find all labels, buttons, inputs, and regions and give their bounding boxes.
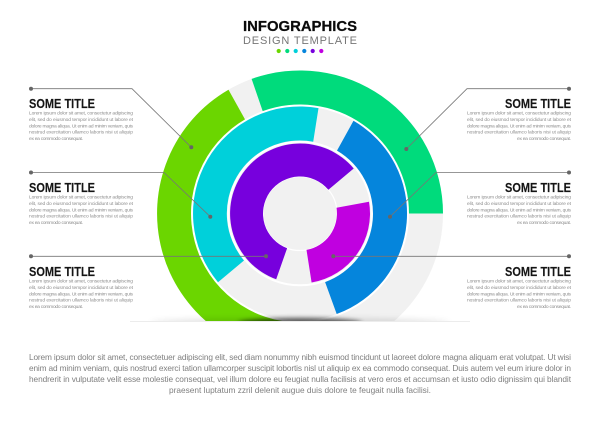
callout text: nostrud exercitation ullamco laboris nisi ut aliquip bbox=[467, 130, 571, 136]
segment: cyan middle ring bbox=[193, 106, 318, 282]
callout text bbox=[29, 279, 134, 310]
footer paragraph: hendrerit in vulputate velit esse molestie consequat, vel illum dolore eu feugiat nulla facilisis at vero eros et accumsan et iusto odio dignissim qui blandit bbox=[29, 374, 572, 384]
callout title: SOME TITLE bbox=[29, 265, 95, 279]
leader line bbox=[388, 170, 571, 219]
subheading: design template: DESIGN TEMPLATE bbox=[243, 35, 357, 47]
callout text: Lorem ipsum dolor sit amet, consectetur adipiscing bbox=[29, 111, 133, 117]
callout: middle left bbox=[29, 170, 212, 226]
heading: infographics: INFOGRAPHICS bbox=[243, 19, 357, 35]
colour dots bbox=[277, 49, 323, 53]
callout text bbox=[467, 279, 572, 310]
leader line bbox=[29, 87, 193, 149]
chart background rings bbox=[218, 79, 443, 321]
callout: bottom left bbox=[29, 254, 268, 310]
footer paragraph bbox=[29, 352, 572, 395]
callout text: nostrud exercitation ullamco laboris nisi ut aliquip bbox=[29, 214, 133, 220]
callout text bbox=[467, 111, 572, 142]
leader line bbox=[29, 254, 268, 258]
callout text: Lorem ipsum dolor sit amet, consectetur adipiscing bbox=[467, 279, 571, 285]
ground shadow bbox=[158, 314, 442, 321]
callout text: ex ea commodo consequat. bbox=[29, 304, 83, 310]
callout text: nostrud exercitation ullamco laboris nisi ut aliquip bbox=[467, 298, 571, 304]
callout title: SOME TITLE bbox=[505, 97, 571, 111]
segment: purple inner ring bbox=[230, 143, 354, 279]
leader line bbox=[331, 254, 571, 258]
callout text bbox=[29, 195, 134, 226]
callout text: elit, sed do eiusmod tempor incididunt ut labore et bbox=[467, 117, 572, 123]
segment: blue middle ring bbox=[325, 121, 407, 314]
callout text: dolore magna aliqua. Ut enim ad minim veniam, quis bbox=[29, 291, 134, 297]
callout text: nostrud exercitation ullamco laboris nisi ut aliquip bbox=[29, 130, 133, 136]
callout text: elit, sed do eiusmod tempor incididunt ut labore et bbox=[467, 285, 572, 291]
callout text: ex ea commodo consequat. bbox=[29, 136, 83, 142]
callout text: dolore magna aliqua. Ut enim ad minim veniam, quis bbox=[467, 123, 572, 129]
footer paragraph: praesent luptatum zzril delenit augue duis dolore te feugait nulla facilisi. bbox=[169, 385, 431, 395]
callout text: Lorem ipsum dolor sit amet, consectetur adipiscing bbox=[467, 111, 571, 117]
callout text bbox=[29, 111, 134, 142]
callout text: ex ea commodo consequat. bbox=[517, 304, 571, 310]
callout: middle right bbox=[388, 170, 572, 226]
segment: emerald outer ring bbox=[252, 70, 443, 214]
callout text: dolore magna aliqua. Ut enim ad minim veniam, quis bbox=[467, 291, 572, 297]
callout text: ex ea commodo consequat. bbox=[517, 220, 571, 226]
callout text: Lorem ipsum dolor sit amet, consectetur adipiscing bbox=[467, 195, 571, 201]
leader line bbox=[404, 87, 571, 151]
callout title: SOME TITLE bbox=[505, 181, 571, 195]
title bbox=[243, 19, 357, 53]
leader line bbox=[29, 170, 212, 219]
callout title: SOME TITLE bbox=[29, 181, 95, 195]
callout text: ex ea commodo consequat. bbox=[517, 136, 571, 142]
callout: bottom right bbox=[331, 254, 572, 310]
callout text bbox=[467, 195, 572, 226]
callout text: Lorem ipsum dolor sit amet, consectetur adipiscing bbox=[29, 195, 133, 201]
segment: magenta inner ring bbox=[306, 202, 370, 282]
callout text: elit, sed do eiusmod tempor incididunt ut labore et bbox=[467, 201, 572, 207]
callout text: nostrud exercitation ullamco laboris nisi ut aliquip bbox=[467, 214, 571, 220]
footer paragraph: Lorem ipsum dolor sit amet, consectetuer adipiscing elit, sed diam nonummy nibh euismod tincidunt ut laoreet dolore magna aliquam erat volutpat. Ut wisi bbox=[29, 352, 571, 362]
callout: top left bbox=[29, 87, 193, 149]
callout text: Lorem ipsum dolor sit amet, consectetur adipiscing bbox=[29, 279, 133, 285]
callout text: elit, sed do eiusmod tempor incididunt ut labore et bbox=[29, 201, 134, 207]
callout text: elit, sed do eiusmod tempor incididunt ut labore et bbox=[29, 285, 134, 291]
segment: lime outer ring bbox=[157, 90, 282, 321]
ground line bbox=[130, 321, 470, 322]
radial chart bbox=[157, 70, 443, 321]
callout text: nostrud exercitation ullamco laboris nisi ut aliquip bbox=[29, 298, 133, 304]
callout title: SOME TITLE bbox=[29, 97, 95, 111]
callout text: dolore magna aliqua. Ut enim ad minim veniam, quis bbox=[29, 207, 134, 213]
callout: top right bbox=[404, 87, 572, 151]
callout title: SOME TITLE bbox=[505, 265, 571, 279]
callout text: ex ea commodo consequat. bbox=[29, 220, 83, 226]
callout text: dolore magna aliqua. Ut enim ad minim veniam, quis bbox=[467, 207, 572, 213]
callout text: dolore magna aliqua. Ut enim ad minim veniam, quis bbox=[29, 123, 134, 129]
footer paragraph: enim ad minim veniam, quis nostrud exerci tation ullamcorper suscipit lobortis nisl ut aliquip ex ea commodo consequat. Duis autem vel eum iriure dolor in bbox=[29, 363, 571, 373]
callout text: elit, sed do eiusmod tempor incididunt ut labore et bbox=[29, 117, 134, 123]
